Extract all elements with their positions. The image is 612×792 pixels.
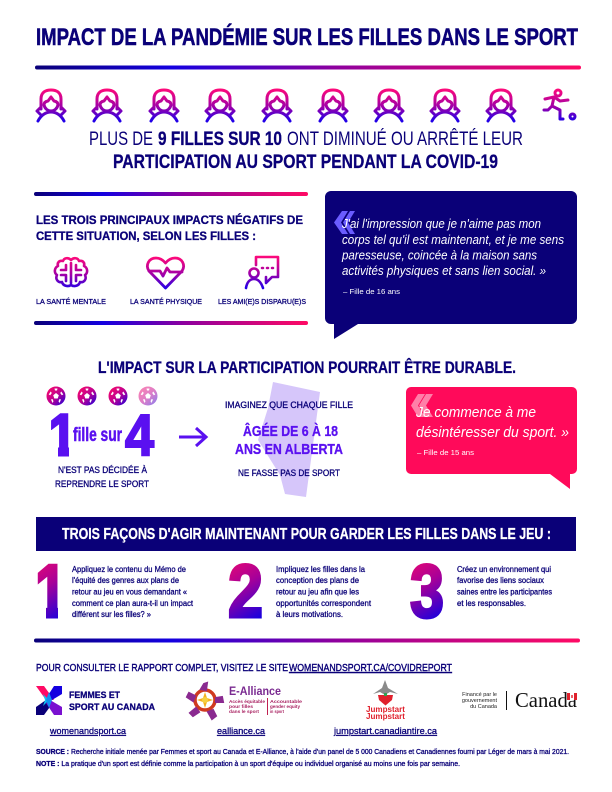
headline: PARTICIPATION AU SPORT PENDANT LA COVID-19	[113, 152, 498, 173]
headline: PLUS DE	[89, 129, 153, 150]
arrow	[179, 428, 206, 446]
logo: Jumpstart: Jumpstart	[366, 705, 405, 714]
icon: heart with pulse	[147, 258, 184, 288]
step 1: l'équité des genres aux plans de	[72, 575, 179, 585]
statistic: 1 girl in 4: fille sur	[73, 425, 122, 446]
heading: three impacts: LES TROIS PRINCIPAUX IMPACTS NÉGATIFS DE	[36, 212, 303, 227]
text: imagine: NE FASSE PAS DE SPORT	[238, 468, 340, 478]
statistic: 1 girl in 4: 4	[125, 403, 154, 468]
link: full report: WOMENANDSPORT.CA/COVIDREPORT	[289, 662, 452, 674]
callout: quote from 16-year-old: corps tel qu'il est maintenant, et je me sens	[342, 233, 564, 247]
step 1: comment ce plan aura-t-il un impact	[72, 598, 194, 608]
logo: Government of Canada: gouvernement	[462, 698, 497, 704]
logo: Government of Canada: Canada	[515, 688, 578, 712]
text: not decided	[55, 465, 149, 489]
link: womenandsport.ca: womenandsport.ca	[49, 726, 126, 736]
logo: E-Alliance: gender equity	[270, 704, 300, 709]
icon: E-Alliance flower	[187, 683, 223, 719]
logo: Jumpstart: Jumpstart	[366, 712, 405, 721]
icon row: nine girls and one runner	[37, 90, 575, 121]
text: imagine	[225, 400, 353, 478]
labels: impacts: LA SANTÉ MENTALE	[36, 297, 106, 306]
logo: E-Alliance: dans le sport	[229, 709, 260, 714]
step 3: favorise des liens sociaux	[457, 575, 545, 585]
source and note	[36, 749, 569, 768]
step 2: retour au jeu afin que les	[276, 586, 359, 596]
step 3	[410, 549, 552, 633]
icon: runner	[544, 90, 575, 119]
callout: quote from 16-year-old: paresseuse, coincée à la maison sans	[341, 248, 537, 262]
logo: Government of Canada: Financé par le	[462, 692, 497, 698]
step 1: différent sur les filles? »	[72, 609, 151, 619]
step 2: à leurs motivations.	[276, 609, 343, 619]
logo: E-Alliance	[187, 683, 303, 719]
source and note: SOURCE : Recherche initiale menée par Femmes et sport au Canada et E-Alliance, à l'aide d'un panel de 5 000 Canadiens et Canadiennes fourni par Léger de mars à mai 2021.	[36, 749, 569, 756]
icon: brain	[55, 258, 87, 286]
source and note: NOTE : La pratique d'un sport est définie comme la participation à un sport d'équipe ou individuel organisé au moins une fois par semaine.	[36, 761, 460, 768]
panel: three main impacts	[36, 212, 306, 306]
step 1	[38, 564, 194, 618]
callout: quote from 16-year-old: J'ai l'impression que je n'aime pas mon	[341, 217, 541, 231]
text: imagine: ANS EN ALBERTA	[235, 442, 343, 458]
step 2: conception des plans de	[276, 575, 359, 585]
text: not decided: N'EST PAS DÉCIDÉE À	[58, 465, 147, 475]
step 1: 1	[35, 549, 67, 633]
step 3: 3	[410, 549, 444, 633]
step 2: Impliquez les filles dans la	[276, 564, 365, 574]
icon: X mark	[36, 686, 62, 715]
step 1: Appliquez le contenu du Mémo de	[72, 564, 186, 574]
step 2: 2	[228, 549, 263, 633]
text: not decided: REPRENDRE LE SPORT	[55, 479, 149, 489]
icon: missing friends	[246, 257, 278, 288]
text: imagine: ÂGÉE DE 6 À 18	[243, 422, 338, 440]
headline: 9 FILLES SUR 10	[158, 129, 282, 150]
link: jumpstart: jumpstart.canadiantire.ca	[333, 726, 437, 736]
logo: Jumpstart	[366, 680, 405, 721]
callout: quote from 15-year-old: Je commence à me	[415, 404, 536, 421]
logo: E-Alliance: in sport	[270, 709, 284, 714]
logo: Femmes et Sport au Canada	[36, 686, 155, 715]
callout: quote from 16-year-old: activités physiques et sans lien social. »	[342, 264, 546, 278]
callout: quote from 15-year-old: – Fille de 15 ans	[417, 448, 474, 457]
step 1: retour au jeu en vous demandant «	[72, 586, 187, 596]
callout: quote from 15-year-old: désintéresser du sport. »	[416, 424, 569, 441]
headline: ONT DIMINUÉ OU ARRÊTÉ LEUR	[287, 128, 523, 150]
logo: Femmes et Sport au Canada: SPORT AU CANADA	[69, 702, 155, 713]
statistic: 1 girl in 4: 1	[49, 403, 76, 468]
logo: Femmes et Sport au Canada: FEMMES ET	[69, 690, 120, 701]
labels: impacts: LA SANTÉ PHYSIQUE	[130, 297, 202, 306]
link: ealliance.ca: ealliance.ca	[217, 726, 265, 736]
logo: Government of Canada: du Canada	[470, 704, 498, 710]
callout: quote from 15-year-old	[406, 387, 577, 489]
panel: Alberta	[225, 382, 353, 497]
logo: E-Alliance: E-Alliance	[229, 684, 281, 698]
step 3: et les responsables.	[457, 598, 526, 608]
step 2: opportunités correspondent	[276, 598, 372, 608]
step 2	[228, 549, 372, 633]
callout: quote from 16-year-old	[325, 191, 577, 339]
callout: quote from 16-year-old: – Fille de 16 ans	[343, 287, 400, 296]
icon: four balls	[46, 386, 158, 406]
banner: three ways to act	[36, 517, 576, 551]
statistic: 1 girl in 4	[51, 413, 155, 456]
logo: E-Alliance: Accès équitable	[229, 699, 266, 704]
heading: lasting impact: L'IMPACT SUR LA PARTICIPATION POURRAIT ÊTRE DURABLE.	[98, 358, 516, 377]
logo: E-Alliance: pour filles	[229, 704, 254, 709]
heading: three impacts: CETTE SITUATION, SELON LES FILLES :	[36, 229, 256, 243]
link: full report: POUR CONSULTER LE RAPPORT COMPLET, VISITEZ LE SITE	[36, 662, 288, 674]
logo: Government of Canada	[462, 688, 578, 712]
text: imagine: IMAGINEZ QUE CHAQUE FILLE	[225, 400, 353, 410]
heading: three impacts	[36, 212, 303, 243]
step 3: saines entre les participantes	[457, 586, 552, 596]
headline	[89, 128, 523, 173]
labels: impacts	[36, 297, 306, 306]
panel: one girl in four	[46, 386, 158, 489]
step 3: Créez un environnement qui	[457, 564, 551, 574]
map: Alberta	[258, 382, 320, 497]
logo: E-Alliance: Accountable	[270, 699, 303, 704]
labels: impacts: LES AMI(E)S DISPARU(E)S	[218, 297, 306, 306]
